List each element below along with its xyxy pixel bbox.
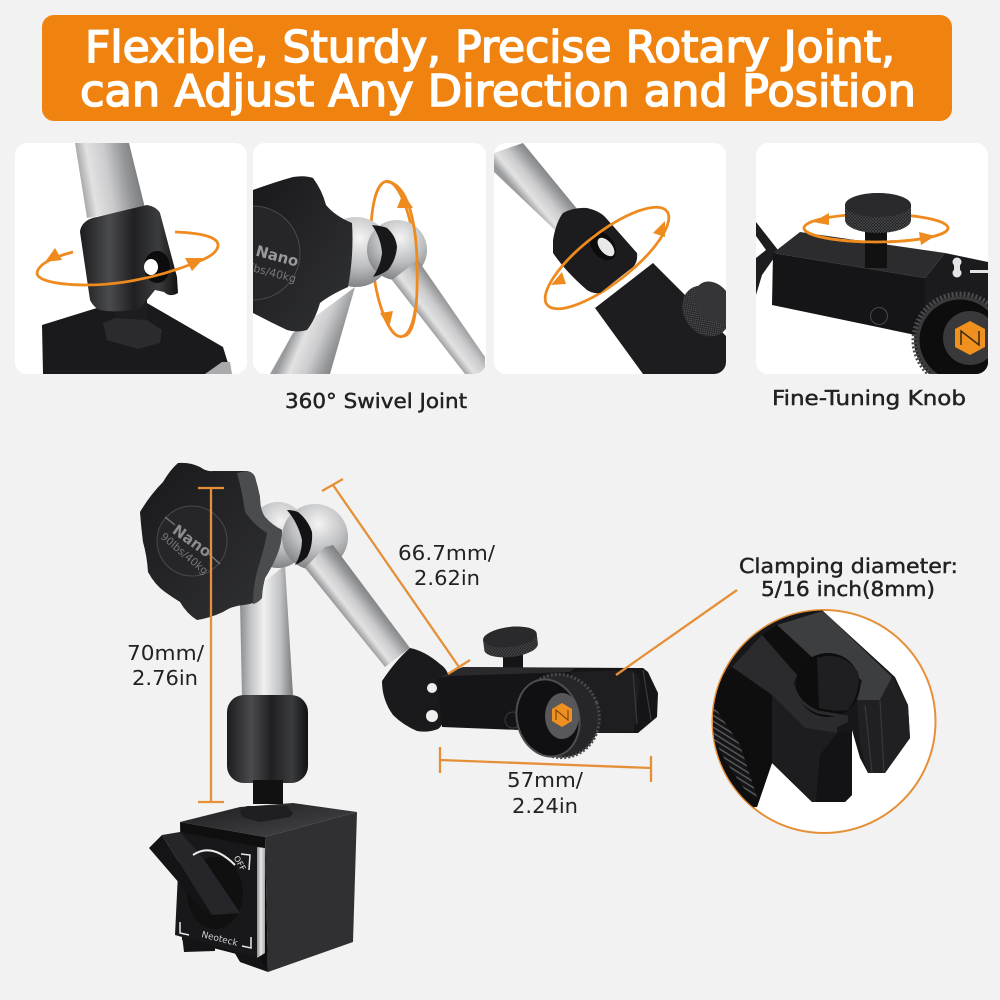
arrowhead upper [653, 221, 665, 237]
screw stem [865, 232, 887, 268]
clamp block [595, 263, 727, 374]
star knob [140, 463, 282, 620]
foot right [233, 950, 268, 972]
foot left [182, 935, 215, 952]
label: 66.7mm [398, 541, 495, 590]
arrowhead left [45, 248, 62, 262]
dial [187, 857, 243, 929]
rear arm down-right [392, 260, 485, 374]
base metal strip [205, 362, 232, 374]
knob face circle [253, 206, 300, 300]
fine tuning wheel [914, 294, 1000, 386]
block top face [437, 667, 575, 678]
arm end [756, 222, 778, 295]
title banner: can Adjust Any Direction and Position [80, 66, 916, 117]
label: clamping diameter: 5/16 inch(8mm) [761, 577, 935, 601]
base right face [265, 812, 357, 972]
arm opening [756, 236, 766, 258]
collar slot [590, 232, 616, 260]
label: clamping diameter [739, 554, 958, 601]
block top face [773, 232, 945, 278]
label: 70mm [127, 641, 204, 690]
arrowhead lower [551, 272, 566, 285]
back rotation arc [804, 214, 948, 242]
corner marks [180, 854, 251, 948]
end collar [382, 648, 448, 732]
title banner: Flexible, Sturdy, Precise Rotary Joint, [85, 22, 895, 73]
dimension: height [198, 488, 224, 802]
knob label: Nano [254, 242, 301, 271]
circular inset: clamp detail [700, 600, 936, 833]
black collar [80, 205, 178, 311]
upper surface [777, 611, 892, 700]
nut [240, 806, 293, 822]
knurled wheel [712, 703, 758, 800]
knob face [157, 506, 227, 576]
panel: fine tuning knob [756, 143, 1000, 386]
collar hole highlight [144, 259, 158, 275]
knurled screw [845, 193, 911, 233]
clamp knob [253, 176, 352, 332]
label: 66.7mm: 66.7mm/ [398, 541, 495, 565]
block front face [772, 253, 925, 337]
stem [144, 300, 147, 304]
arrowhead right [919, 232, 935, 245]
arrowhead down [380, 311, 393, 326]
thumb screw [482, 624, 539, 660]
slot highlight [598, 238, 614, 256]
plate metal edge [257, 847, 265, 958]
label: 70mm: 70mm/ [127, 641, 204, 665]
arrowhead up [397, 193, 413, 208]
block body [437, 667, 658, 733]
jaw grooves [633, 670, 651, 724]
product: clamp [437, 624, 658, 769]
label: 57mm [507, 768, 583, 818]
vertical rod [240, 565, 293, 698]
lower face right [816, 730, 852, 802]
base front [180, 822, 268, 972]
block pin circle [870, 308, 888, 324]
knob label [253, 245, 298, 284]
panel: lower joint rotation [15, 143, 247, 374]
collar opening [144, 251, 170, 283]
thumb screw [682, 282, 726, 336]
knob text: 90lbs/40kg [158, 531, 210, 577]
knob rim facet [237, 471, 282, 604]
round knob [508, 663, 611, 769]
diagonal arm [305, 545, 410, 667]
groove [762, 625, 815, 675]
knob text: Nano [169, 521, 215, 561]
label: 70mm: 2.76in [132, 666, 198, 690]
label: clamping diameter: Clamping diameter: [739, 554, 958, 578]
collar holes [426, 683, 438, 722]
wheel body [705, 667, 772, 807]
panel: upper joint rotation [253, 143, 486, 374]
dimension: clamp width [440, 747, 651, 782]
front rotation arc [386, 182, 417, 336]
lower faces [772, 695, 837, 802]
knob label: 90lbs/40kg [235, 257, 298, 286]
jaw [857, 677, 910, 773]
label: 66.7mm: 2.62in [414, 566, 480, 590]
stem [253, 780, 283, 804]
joint balls [248, 502, 348, 570]
silver rod [494, 143, 578, 230]
back rotation arc [37, 232, 218, 273]
block pin [505, 712, 521, 728]
back rotation arc [546, 210, 670, 310]
front rotation arc [804, 228, 948, 242]
caption: fine tuning: Fine-Tuning Knob [772, 386, 966, 410]
rear arm down-left [270, 287, 355, 374]
clamp hole [796, 653, 860, 717]
magnetic base corner [42, 303, 232, 374]
lower collar [227, 695, 308, 783]
arrowhead left [813, 213, 829, 225]
panel: clamp joint rotation [494, 143, 740, 374]
brand label: Neoteck [200, 930, 239, 949]
label: 57mm: 2.24in [512, 794, 578, 818]
ball collar [553, 208, 637, 293]
back rotation arc [370, 180, 414, 338]
off label: OFF [232, 854, 248, 873]
front rotation arc [544, 206, 668, 306]
dial arc [193, 850, 235, 865]
label: 57mm: 57mm/ [507, 768, 583, 792]
thumb screw stem [503, 646, 523, 678]
base top face [180, 803, 357, 837]
hole interior wall [817, 656, 859, 711]
knob text [158, 517, 220, 577]
title banner [42, 15, 952, 121]
keyhole slot [952, 258, 988, 278]
joint balls [344, 217, 427, 287]
lever [149, 832, 240, 915]
jaw face [570, 670, 640, 733]
hole lower rim [793, 685, 848, 717]
front rotation arc [37, 262, 197, 285]
front plate [175, 832, 265, 958]
dimension: arm length [322, 479, 470, 674]
clamp body [700, 600, 910, 810]
caption: swivel joint: 360° Swivel Joint [285, 389, 467, 413]
jaw grooves [865, 700, 884, 773]
hex nut [103, 318, 162, 349]
mid surface [732, 635, 848, 733]
product: magnetic stand [140, 463, 448, 972]
right clamp section [925, 253, 988, 374]
arrowhead right [185, 258, 204, 271]
silver rod [75, 143, 145, 218]
leader: clamping diameter [616, 590, 737, 675]
